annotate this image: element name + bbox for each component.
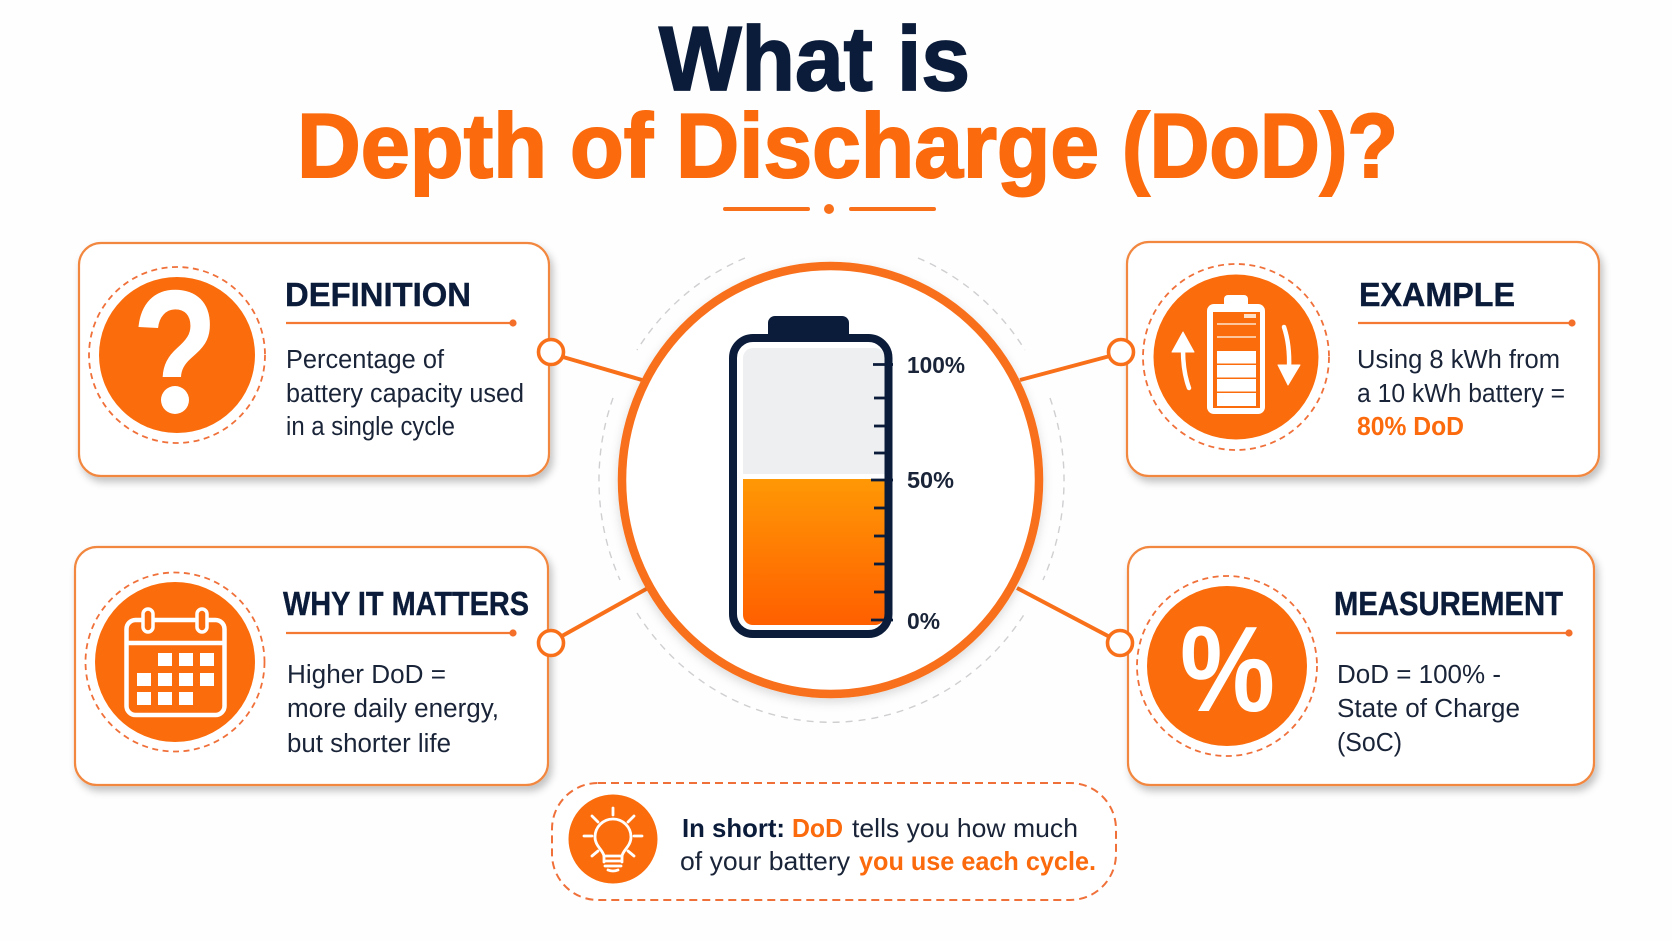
connector: example — [1020, 356, 1110, 380]
title: (DoD)? — [1122, 96, 1398, 197]
example text: Using 8 kWh from — [1357, 346, 1560, 374]
icon: question mark — [89, 253, 265, 452]
battery cap — [768, 316, 849, 342]
why it matters text: Higher DoD = — [287, 661, 446, 689]
heading: definition: DEFINITION — [285, 277, 471, 314]
icon: percent: % — [1180, 601, 1275, 737]
scale labels: 0% — [907, 608, 940, 634]
title — [297, 9, 1398, 197]
measurement text: DoD = 100% - — [1337, 661, 1501, 689]
definition text — [286, 346, 524, 441]
measurement text: (SoC) — [1337, 729, 1402, 757]
definition text: in a single cycle — [286, 413, 455, 441]
node: example — [1108, 340, 1134, 364]
battery gauge — [733, 316, 965, 634]
node: measurement — [1108, 630, 1132, 656]
title: Depth — [297, 96, 547, 197]
definition text: battery capacity used — [286, 380, 524, 408]
central circle — [622, 266, 1039, 694]
panel: why it matters — [75, 547, 548, 785]
icon: calendar — [86, 572, 264, 752]
measurement text: State of Charge — [1337, 695, 1520, 723]
heading rule — [286, 629, 517, 637]
title: of — [570, 96, 654, 197]
icon: light bulb — [568, 794, 658, 884]
title divider — [725, 204, 934, 214]
title: Discharge — [676, 96, 1099, 197]
scale ticks — [871, 364, 893, 620]
example text: a 10 kWh battery = — [1357, 380, 1565, 408]
scale labels — [907, 352, 965, 634]
scale labels: 50% — [907, 467, 954, 493]
heading rule — [1336, 629, 1573, 637]
heading: example: EXAMPLE — [1359, 277, 1515, 314]
heading rule — [1358, 319, 1576, 327]
panel: example — [1127, 242, 1599, 476]
dashed ring around centre — [599, 258, 1064, 722]
why it matters text — [287, 661, 499, 758]
callout text: tells you how much — [852, 813, 1078, 843]
scale labels: 100% — [907, 352, 965, 378]
empty portion — [743, 348, 885, 474]
callout: in short — [552, 783, 1116, 900]
heading: measurement: MEASUREMENT — [1334, 586, 1563, 623]
callout text — [680, 813, 1096, 876]
example text — [1357, 346, 1565, 441]
panel: definition — [79, 243, 549, 476]
definition text: Percentage of — [286, 346, 445, 374]
battery shell — [733, 338, 888, 634]
icon: percent — [1137, 576, 1317, 756]
example text: 80% DoD — [1357, 413, 1464, 441]
icon: question mark: ? — [132, 253, 218, 452]
node: definition — [538, 340, 564, 364]
callout text: DoD — [792, 813, 843, 843]
node: why it matters — [538, 630, 564, 656]
panel: measurement — [1128, 547, 1594, 785]
connector: measurement — [1017, 588, 1108, 636]
callout text: you use each cycle. — [859, 846, 1096, 876]
why it matters text: more daily energy, — [287, 695, 499, 723]
icon: battery cycle — [1143, 264, 1329, 450]
measurement text — [1337, 661, 1520, 757]
connector: definition — [563, 357, 642, 380]
heading: why it matters: WHY IT MATTERS — [283, 586, 529, 623]
callout text: In short: — [682, 813, 785, 843]
callout text: of your battery — [680, 846, 850, 876]
heading rule — [286, 319, 517, 327]
connector: why it matters — [562, 588, 648, 636]
title: What is — [659, 9, 970, 110]
charged portion — [743, 479, 885, 625]
why it matters text: but shorter life — [287, 730, 451, 758]
